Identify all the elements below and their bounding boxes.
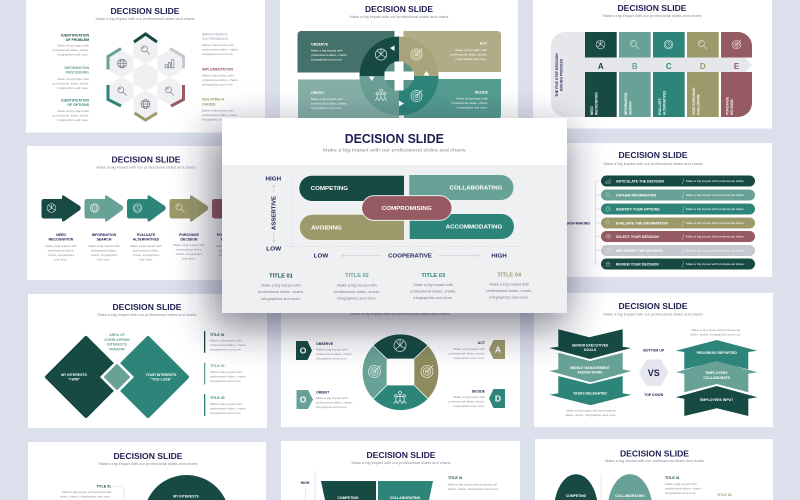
- title list: professional slides, charts,: [210, 343, 247, 347]
- right labels: infographics and more.: [202, 82, 234, 86]
- right labels: CHOICE: [202, 102, 216, 106]
- quadrant text: infographics and more.: [457, 106, 488, 110]
- arrow 3: charts, infographics: [133, 253, 160, 257]
- title 01: professional slides, charts,: [258, 289, 304, 294]
- tag A act: Make a big impact with: [454, 347, 485, 351]
- slide: bottom right partial: [535, 439, 773, 500]
- VS hexagon: [639, 348, 668, 397]
- right labels: infographics and more.: [202, 52, 234, 56]
- title list: [204, 331, 247, 416]
- title list: infographics and more.: [210, 411, 242, 415]
- column A: [585, 32, 617, 117]
- slide: OODA quadrants: Make a big impact with our professional slides and charts: [350, 15, 449, 19]
- slide: five step process: Make a big impact with our professional slides and charts: [602, 14, 702, 18]
- title list: Make a big impact with: [210, 338, 242, 342]
- diamond labels: "I WIN": [68, 378, 80, 382]
- quadrant collaborating: [409, 175, 514, 200]
- step pills: SELECT YOUR DECISION: [616, 235, 659, 239]
- right labels: ISOLATING A: [202, 98, 225, 102]
- bottom up arrows: COLLABORATE: [703, 376, 731, 380]
- left labels: IDENTIFICATION: [61, 34, 89, 38]
- arrow 1: RECOGNITION: [49, 238, 74, 242]
- title note: [448, 476, 499, 491]
- left labels: infographics and more.: [58, 86, 89, 90]
- slide: bottom right partial: DECISION SLIDE: [620, 450, 690, 458]
- title note: Make a big impact with professional: [62, 490, 111, 494]
- list label: DECISION-MAKING: [558, 222, 590, 226]
- slide: steps list: DECISION SLIDE: [618, 151, 688, 160]
- step pills: Make a big impact with professional slides: [686, 207, 744, 211]
- column D: EVALUATION: [696, 94, 700, 115]
- tag D decide: D: [495, 394, 501, 404]
- step pills: Make a big impact with professional slides: [686, 235, 744, 239]
- step pills: Make a big impact with professional slides: [686, 193, 744, 197]
- diamond labels: MY INTERESTS: [61, 373, 88, 377]
- slide: bottom left partial: DECISION SLIDE: [114, 452, 183, 461]
- diamond labels: YOUR INTERESTS: [146, 373, 177, 377]
- step pills: ARTICULATE THE DECISION: [616, 179, 664, 183]
- left labels: professional slides, charts,: [53, 114, 89, 118]
- tag O orient: Make a big impact with: [316, 396, 348, 400]
- column D: POST-PURCHASE: [692, 88, 696, 115]
- top down chevrons: SENIOR EXECUTIVES: [572, 344, 609, 348]
- arrow 3: Make a big impact with: [130, 244, 162, 248]
- quadrant text: professional slides, charts,: [452, 101, 488, 105]
- overlap diamond: [100, 360, 134, 394]
- arrow 4: charts, infographics: [176, 252, 203, 256]
- column A: RECOGNITION: [594, 92, 598, 115]
- process name: MAKING PROCESS: [560, 58, 564, 91]
- compromising pill: COMPROMISING: [382, 206, 432, 212]
- trapezoid competing: COMPETING: [337, 496, 359, 500]
- trapezoid competing: [321, 481, 376, 500]
- slide: overlapping interests: [28, 294, 267, 428]
- quadrant text: ORIENT: [311, 91, 325, 95]
- bottom up arrows: EMPLOYEES: [706, 371, 728, 375]
- bottom up arrows: [676, 340, 757, 416]
- left labels: OF PROBLEM: [66, 38, 89, 42]
- quadrant competing: COMPETING: [311, 186, 348, 192]
- top down chevrons: TASKS DELEGATED: [573, 392, 607, 396]
- slide: five step process: DECISION SLIDE: [618, 4, 687, 13]
- left labels: professional slides, charts,: [53, 82, 89, 86]
- arrow 1: Make a big impact with: [45, 244, 77, 248]
- column B: SEARCH: [628, 101, 632, 115]
- quadrant text: DECIDE: [475, 90, 489, 94]
- title 04: infographics and more.: [490, 294, 529, 300]
- quadrant text: OBSERVE: [311, 42, 329, 46]
- bottom up arrows: PROGRESS REPORTED: [697, 351, 737, 355]
- slide: arrow process: Make a big impact with our professional slides and charts: [96, 166, 196, 170]
- tag O orient: O: [300, 394, 307, 404]
- subtitle: Make a big impact with our professional slides and charts: [323, 148, 466, 154]
- tag D decide: [449, 389, 505, 408]
- title note: TITLE 01: [96, 484, 111, 488]
- arrow 5: POST-PURCHASE: [217, 233, 248, 237]
- slide: five step process: [533, 0, 772, 128]
- slide: OODA ring: [281, 296, 520, 427]
- left labels: infographics and more.: [58, 52, 89, 56]
- bottom up note: Make a big impact with professional: [691, 328, 741, 332]
- VS hexagon: TOP DOWN: [644, 393, 664, 397]
- arrow 1: professional slides,: [48, 248, 74, 252]
- tag A act: infographics and more.: [454, 356, 485, 360]
- ring segments: [362, 334, 439, 410]
- quadrant text: professional slides, charts,: [451, 52, 487, 56]
- title notes: professional slides, charts,: [665, 486, 702, 490]
- title 03: Make a big impact with: [414, 282, 453, 287]
- quadrant competing: [299, 176, 404, 201]
- step pills: EVALUATE THE INFORMATION: [616, 221, 668, 225]
- assertive axis: [266, 176, 293, 252]
- right labels: Make a big impact with: [202, 43, 234, 47]
- step pills: Make a big impact with professional slides: [686, 262, 744, 266]
- top down note: Make a big impact with professional: [566, 408, 616, 412]
- tag O observe: infographics and more.: [316, 356, 348, 360]
- title 02: Make a big impact with: [337, 282, 377, 287]
- arrow 5: [212, 199, 248, 257]
- step pills: IMPLEMENT THE DECISION: [616, 249, 663, 253]
- title 03: professional slides, charts,: [410, 288, 456, 294]
- center card shadow: [212, 130, 567, 328]
- arrow 5: charts, infographics: [219, 253, 246, 257]
- title 02: [334, 273, 380, 300]
- title list: infographics and more.: [210, 348, 242, 352]
- arrow 3: and more.: [139, 258, 153, 262]
- slide: steps list: [535, 143, 772, 277]
- slide: bottom left partial: Make a big impact with our professional slides and charts: [98, 462, 198, 466]
- title note: slides, charts, infographics and more.: [448, 487, 499, 491]
- VS hexagon: VS: [648, 368, 660, 378]
- cooperative axis: [287, 247, 525, 260]
- slide: arrow process: DECISION SLIDE: [112, 156, 181, 164]
- title note: Make a big impact with professional: [448, 482, 497, 486]
- quadrant text: infographics and more.: [311, 58, 343, 62]
- step pills: [601, 176, 755, 270]
- slide: bottom middle partial: Make a big impact with our professional slides and charts: [352, 461, 451, 465]
- axis: [301, 471, 315, 500]
- trapezoid collaborating: COLLABORATING: [390, 496, 421, 500]
- ellipse competing: COMPETING: [566, 494, 587, 498]
- assertive axis: ASSERTIVE: [272, 195, 278, 230]
- tag O observe: [296, 341, 353, 360]
- slide: arrow process: [27, 146, 265, 280]
- quadrant accommodating: ACCOMMODATING: [446, 224, 502, 230]
- quadrant text: infographics and more.: [311, 106, 343, 110]
- bottom up arrows: EMPLOYEES INPUT: [700, 398, 734, 402]
- step pills: Make a big impact with professional slides: [686, 249, 744, 253]
- assertive axis: LOW: [266, 246, 282, 252]
- title 02: professional slides, charts,: [334, 289, 380, 294]
- left labels: infographics and more.: [58, 118, 89, 122]
- title list: infographics and more.: [210, 379, 242, 383]
- column E: E: [734, 62, 740, 71]
- diamond labels: "YOU LOSE": [150, 378, 172, 382]
- arrow 1: [42, 195, 81, 262]
- title 01: TITLE 01: [269, 274, 293, 280]
- tag O orient: infographics and more.: [316, 405, 348, 409]
- left labels: Make a big impact with: [58, 77, 89, 81]
- left diamond: [47, 338, 125, 416]
- tag O observe: O: [300, 346, 307, 356]
- arrow 1: and more.: [54, 258, 68, 262]
- title list: TITLE 02: [210, 364, 225, 368]
- column C: EVALUATE: [658, 98, 662, 115]
- title notes: infographics and more.: [665, 491, 697, 495]
- title list: TITLE 03: [210, 396, 225, 400]
- quadrant text: professional slides, charts,: [311, 53, 348, 57]
- quadrant text: infographics and more.: [456, 57, 487, 61]
- right labels: IMPROVEMENT: [202, 32, 229, 36]
- title note: [60, 484, 124, 500]
- arrow 2: charts, infographics: [91, 253, 118, 257]
- slide: hexagon process: [26, 0, 265, 132]
- quadrant text: ACT: [480, 42, 488, 46]
- arrow 5: EVALUATION: [221, 238, 244, 242]
- hexagon cluster: [108, 34, 184, 120]
- axis: HIGH: [301, 481, 310, 485]
- column B: [619, 32, 651, 117]
- right labels: Make a big impact with: [202, 108, 234, 112]
- column A: NEED: [590, 105, 594, 115]
- center slide: conflict matrix: [222, 118, 567, 313]
- tag D decide: infographics and more.: [454, 404, 485, 408]
- title notes: TITLE 04: [717, 493, 732, 497]
- quadrant panels: [298, 31, 501, 120]
- tag D decide: professional slides, charts,: [449, 400, 485, 404]
- tag O observe: Make a big impact with: [316, 348, 348, 352]
- left labels: [53, 34, 90, 122]
- slide: bottom left partial: [28, 442, 266, 500]
- diamond labels: OVERLAPPING: [104, 338, 130, 342]
- quadrant text: Make a big impact with: [311, 48, 343, 52]
- process name: THE FIVE STEP DECISION: [555, 53, 559, 97]
- title notes: TITLE 01: [665, 476, 680, 480]
- title 04: [486, 272, 532, 300]
- left labels: INFORMATION: [65, 66, 89, 70]
- slide: OODA quadrants: [280, 0, 518, 128]
- right diamond: [109, 338, 187, 416]
- column E: PURCHASE: [726, 97, 730, 115]
- step pills: GATHER INFORMATION: [616, 193, 656, 197]
- title note: slides, charts, infographics and more.: [60, 494, 111, 498]
- slide: overlapping interests: DECISION SLIDE: [112, 303, 182, 312]
- column C: [653, 32, 685, 117]
- tag O observe: professional slides, charts,: [316, 352, 353, 356]
- trapezoid collaborating: [378, 481, 433, 500]
- right labels: VIA FEEDBACK: [202, 37, 229, 41]
- arrow 2: [84, 195, 123, 262]
- column D: D: [700, 62, 706, 71]
- title 03: TITLE 03: [421, 273, 445, 279]
- title 04: professional slides, charts,: [486, 288, 532, 293]
- column C: ALTERNATIVES: [662, 91, 666, 115]
- title 01: Make a big impact with: [261, 282, 301, 288]
- right labels: IMPLEMENTATION: [202, 68, 233, 72]
- title list: professional slides, charts,: [210, 406, 247, 410]
- title 04: TITLE 04: [497, 272, 521, 278]
- diamond labels: "WIN/WIN": [108, 348, 126, 352]
- left labels: OF OPTIONS: [67, 103, 90, 107]
- quadrant collaborating: COLLABORATING: [450, 186, 502, 192]
- title 04: Make a big impact with: [490, 281, 529, 286]
- title notes: [665, 476, 732, 497]
- left labels: professional slides, charts,: [53, 48, 89, 52]
- VS hexagon: BOTTOM UP: [643, 348, 665, 352]
- tag O orient: ORIENT: [316, 390, 330, 394]
- top down chevrons: GOALS: [584, 348, 597, 352]
- arrow 2: Make a big impact with: [88, 244, 120, 248]
- top down chevrons: MIDDLE MANAGEMENT: [570, 366, 611, 370]
- slide: bottom right partial: Make a big impact with our professional slides and charts: [605, 459, 704, 463]
- bottom up note: slides, charts, infographics and more.: [690, 332, 741, 336]
- list label: PROCESS: [550, 226, 568, 230]
- interests circle: [147, 475, 226, 500]
- slide: top down vs bottom up: Make a big impact with our professional slides and charts: [604, 312, 703, 316]
- ellipse collaborating: [608, 474, 652, 500]
- right labels: Make a big impact with: [202, 74, 234, 78]
- arrow 3: EVALUATE: [137, 233, 156, 237]
- arrow 4: PURCHASE: [179, 233, 199, 237]
- tag O observe: OBSERVE: [316, 342, 334, 346]
- top down note: slides, charts, infographics and more.: [565, 413, 617, 417]
- slide: hexagon process: Make a big impact with our professional slides and charts: [96, 17, 195, 21]
- column B: INFORMATION: [624, 92, 628, 115]
- column B: B: [632, 62, 638, 71]
- arrow 3: professional slides,: [133, 248, 159, 252]
- quadrant accommodating: [410, 214, 514, 239]
- left labels: IDENTIFICATION: [61, 98, 89, 102]
- quadrant avoiding: AVOIDING: [311, 225, 342, 231]
- diamond labels: AREA OF: [109, 333, 126, 337]
- diamond labels: [61, 333, 177, 382]
- slide: OODA quadrants: DECISION SLIDE: [365, 5, 434, 14]
- tag A act: professional slides, charts,: [449, 351, 485, 355]
- arrow 2: SEARCH: [97, 238, 112, 242]
- tag A act: A: [495, 344, 501, 354]
- title 03: infographics and more.: [414, 295, 453, 300]
- cooperative axis: LOW: [314, 254, 329, 260]
- arrow 4: Make a big impact with: [173, 243, 205, 247]
- title 02: TITLE 02: [345, 273, 369, 279]
- title 03: [410, 273, 456, 300]
- interests circle: MY INTERESTS: [173, 494, 200, 498]
- title list: Make a big impact with: [210, 402, 242, 406]
- compromising pill: [362, 196, 452, 220]
- arrow 1: NEED: [56, 233, 66, 237]
- slide: OODA ring: Make a big impact with our professional slides and charts: [350, 312, 450, 316]
- arrow 3: [127, 195, 166, 262]
- right labels: [202, 32, 239, 122]
- quadrant text: [311, 42, 489, 110]
- arrow 2: and more.: [97, 258, 111, 262]
- title: DECISION SLIDE: [345, 132, 444, 146]
- tag O orient: professional slides, charts,: [316, 400, 353, 404]
- arrow 3: ALTERNATIVES: [133, 238, 160, 242]
- bracket: [596, 181, 601, 264]
- diamond labels: INTERESTS: [107, 343, 127, 347]
- tag D decide: Make a big impact with: [454, 395, 485, 399]
- right labels: professional slides, charts,: [202, 113, 239, 117]
- gray arrow band: [551, 32, 752, 117]
- arrow 4: professional slides,: [176, 248, 202, 252]
- ellipse collaborating: COLLABORATING: [615, 494, 645, 498]
- column C: C: [666, 62, 672, 71]
- title note: TITLE 01: [448, 476, 463, 480]
- arrow 4: DECISION: [181, 238, 198, 242]
- arrow 5: professional slides,: [219, 248, 245, 252]
- right labels: professional slides, charts,: [202, 78, 239, 82]
- slide: bottom middle partial: DECISION SLIDE: [366, 451, 436, 460]
- arrow 5: Make a big impact with: [216, 244, 248, 248]
- arrow 4: [170, 195, 208, 260]
- quadrant text: professional slides, charts,: [311, 102, 348, 106]
- tag D decide: DECIDE: [472, 390, 486, 394]
- quadrant text: Make a big impact with: [457, 96, 488, 100]
- column A: A: [598, 62, 604, 71]
- arrow 1: charts, infographics: [48, 253, 75, 257]
- cooperative axis: COOPERATIVE: [388, 254, 433, 260]
- title 02: infographics and more.: [337, 296, 377, 300]
- step pills: IDENTIFY YOUR OPTIONS: [616, 207, 660, 211]
- step pills: REVIEW YOUR DECISION: [616, 262, 659, 266]
- step pills: Make a big impact with professional slides: [686, 179, 744, 183]
- tag A act: [449, 340, 505, 360]
- cooperative axis: HIGH: [491, 254, 507, 260]
- title 01: [258, 274, 304, 301]
- slide: top down vs bottom up: DECISION SLIDE: [618, 302, 688, 311]
- right labels: professional slides, charts,: [202, 48, 239, 52]
- ellipse competing: [555, 474, 597, 500]
- slide: steps list: Make a big impact with our professional slides and charts: [604, 162, 703, 166]
- tag O orient: [296, 390, 353, 409]
- top down chevrons: ASSIGN WORK: [577, 370, 603, 374]
- column E: DECISION: [730, 99, 734, 115]
- column E: [721, 32, 752, 117]
- slide: top down vs bottom up: [534, 293, 773, 427]
- left labels: Make a big impact with: [58, 44, 89, 48]
- title list: Make a big impact with: [210, 370, 242, 374]
- top down chevrons: [549, 329, 632, 405]
- slide: overlapping interests: Make a big impact with our professional slides and charts: [98, 313, 197, 317]
- title list: TITLE 01: [210, 333, 225, 337]
- step pills: Make a big impact with professional slides: [686, 221, 744, 225]
- donut: [360, 36, 438, 116]
- arrow 4: and more.: [182, 256, 196, 260]
- quadrant text: Make a big impact with: [456, 48, 487, 52]
- slide: hexagon process: DECISION SLIDE: [110, 7, 180, 16]
- left labels: PROCESSING: [66, 70, 89, 74]
- arrow 2: professional slides,: [91, 248, 117, 252]
- tag A act: ACT: [478, 341, 486, 345]
- right labels: infographics and more.: [202, 118, 234, 122]
- title list: professional slides, charts,: [210, 374, 247, 378]
- slide: bottom middle partial: [281, 441, 520, 500]
- left labels: Make a big impact with: [58, 109, 89, 113]
- column D: [687, 32, 719, 117]
- title 01: infographics and more.: [261, 296, 301, 301]
- assertive axis: HIGH: [266, 176, 282, 182]
- arrow 2: INFORMATION: [92, 233, 117, 237]
- title notes: Make a big impact with: [665, 482, 697, 486]
- quadrant text: Make a big impact with: [311, 97, 343, 101]
- quadrant avoiding: [300, 215, 404, 240]
